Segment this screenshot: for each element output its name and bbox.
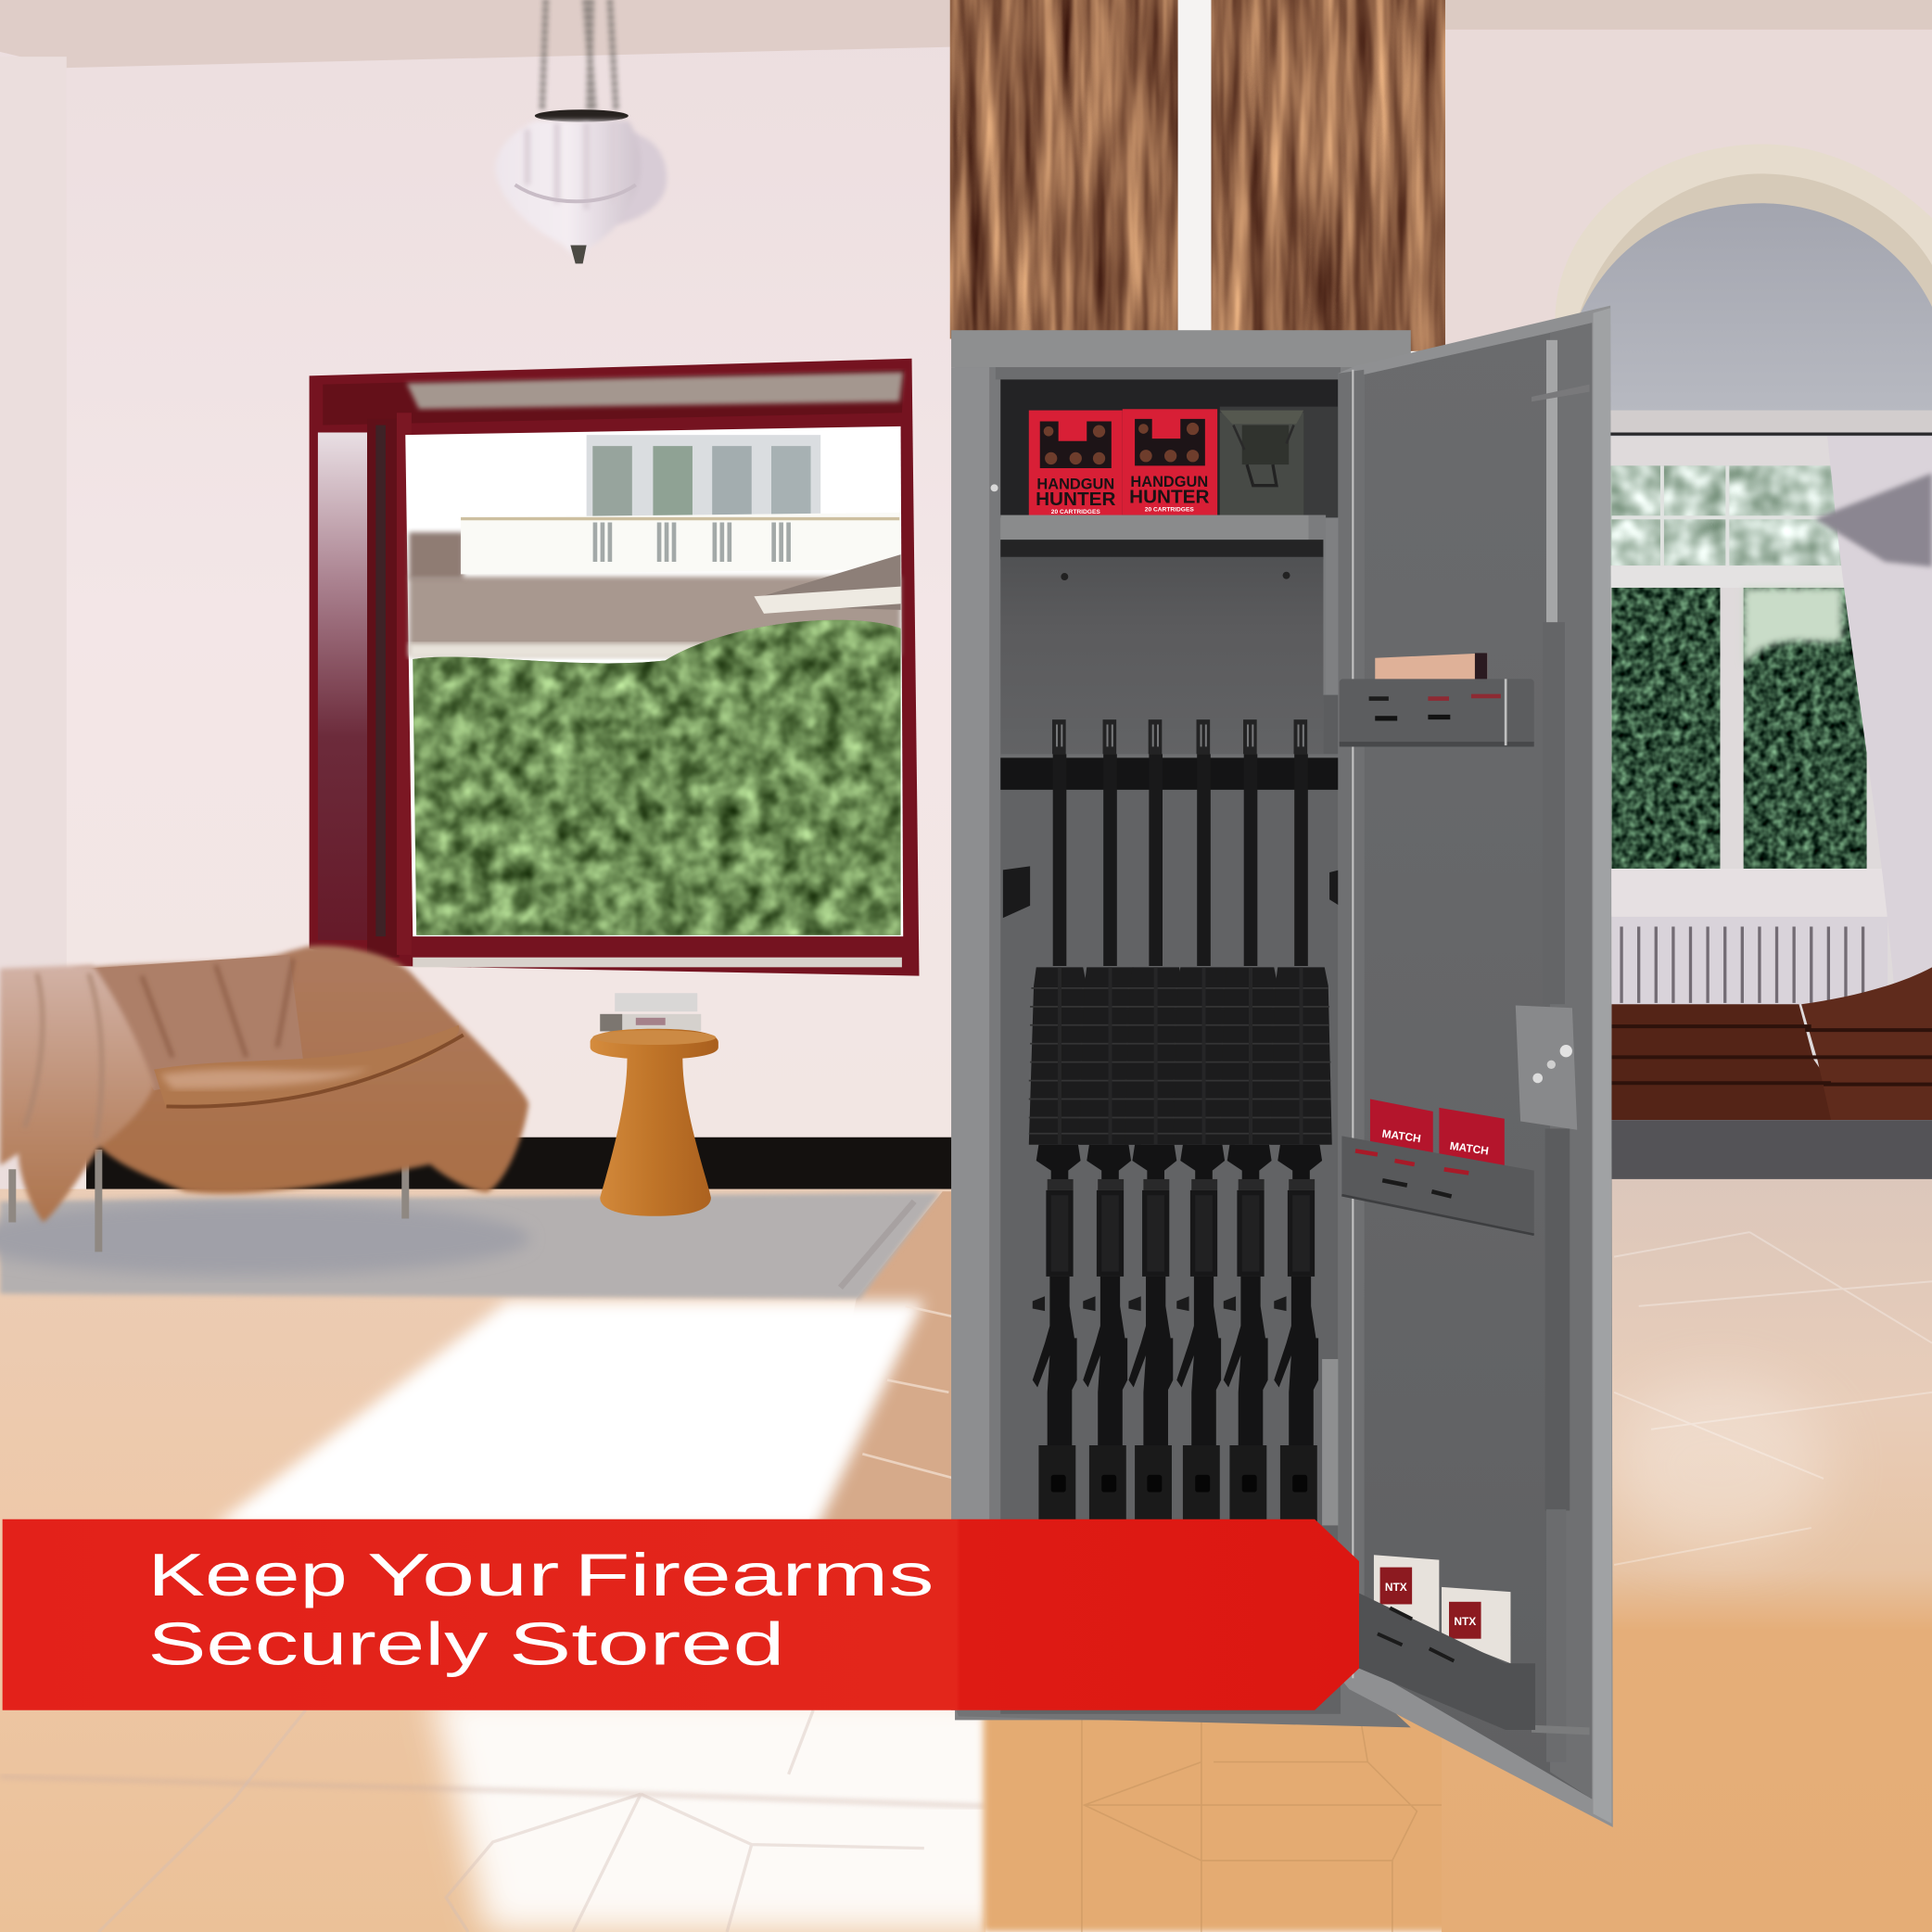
door pocket middle with boxes: MATCH [1381, 1127, 1422, 1145]
upper compartment [991, 379, 1338, 519]
wooden column [950, 0, 1445, 351]
door pocket bottom with boxes [1359, 1555, 1535, 1730]
headline: Firearms [574, 1541, 934, 1608]
door pocket bottom with boxes: NTX [1385, 1581, 1407, 1594]
wood plank right [1211, 0, 1445, 351]
ammo box: handgun hunter 2: 20 CARTRIDGES [1145, 507, 1194, 514]
door pocket middle with boxes: MATCH [1449, 1139, 1490, 1158]
leather sofa [0, 946, 528, 1252]
orange floor foreground [984, 1705, 1553, 1932]
headline: Securely [147, 1610, 489, 1678]
floor left [0, 1189, 1023, 1932]
sofa legs [12, 1150, 405, 1252]
red banner [3, 1519, 1359, 1710]
ammo box: handgun hunter 2: HUNTER [1129, 487, 1209, 507]
ammo box: handgun hunter 1: 20 CARTRIDGES [1051, 509, 1100, 515]
wood plank left [950, 0, 1178, 338]
back wall [0, 0, 961, 1232]
curtain [1827, 436, 1932, 985]
headline: Keep [147, 1541, 348, 1608]
ammo box: handgun hunter 1 [1029, 411, 1123, 519]
back panel [1000, 540, 1341, 1714]
ammo can [1220, 411, 1303, 515]
hanging shade [1815, 473, 1932, 566]
window view [405, 426, 903, 936]
door pocket top with box [1340, 653, 1534, 746]
side table with books [591, 993, 718, 1216]
radiator [1611, 917, 1888, 1006]
headline [147, 1541, 934, 1678]
ammo box: handgun hunter 2: HANDGUN [1130, 473, 1208, 490]
ammo box: handgun hunter 2 [1123, 409, 1217, 515]
shelf [1000, 515, 1326, 695]
pendant lamp [495, 0, 667, 263]
rug [0, 1193, 940, 1299]
gun cabinet [951, 306, 1613, 1827]
right room [1442, 0, 1932, 1932]
ammo box: handgun hunter 1: HANDGUN [1036, 476, 1114, 493]
window left [310, 359, 919, 976]
cabinet body [951, 330, 1411, 1727]
headline: Stored [509, 1610, 785, 1678]
door pocket bottom with boxes: NTX [1454, 1615, 1476, 1628]
door pocket middle with boxes [1341, 1099, 1534, 1235]
right floor [1442, 1179, 1932, 1932]
dark sofa [1611, 967, 1932, 1120]
door [1338, 306, 1613, 1827]
ammo box: handgun hunter 1: HUNTER [1036, 489, 1115, 510]
right window [1602, 465, 1888, 917]
rifles [1029, 719, 1332, 1521]
lock box [1516, 1006, 1577, 1130]
headline: Your [367, 1541, 559, 1608]
archway [1555, 145, 1932, 493]
locking rod [1532, 340, 1590, 1762]
window column [318, 433, 367, 940]
